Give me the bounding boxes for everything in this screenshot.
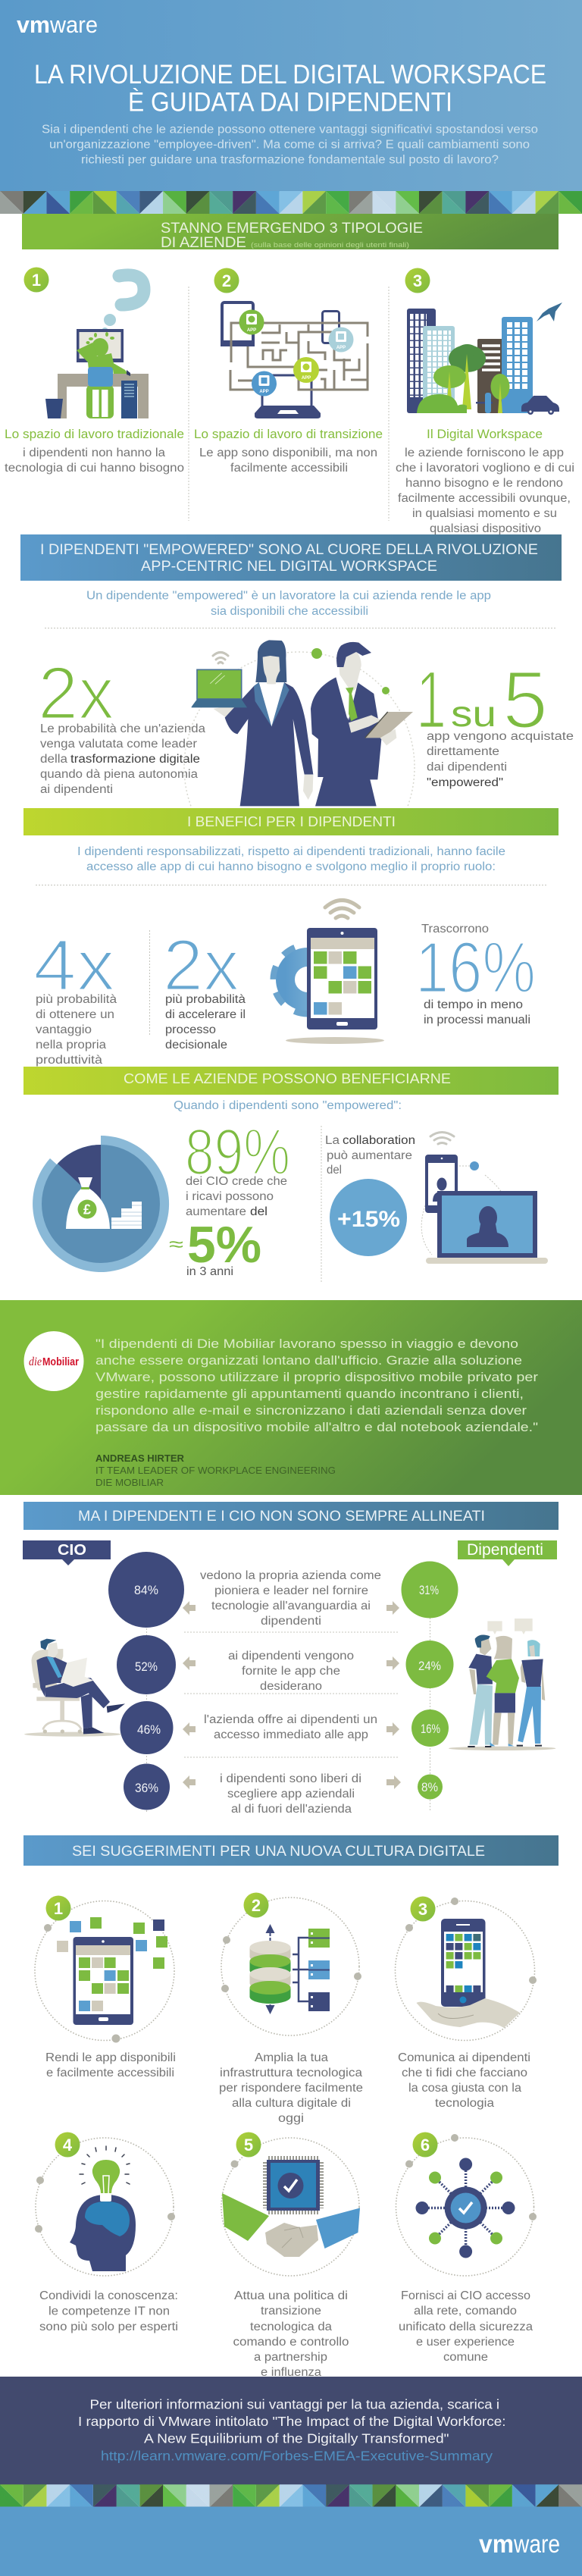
stat: 89%: dei CIO crede che — [186, 1175, 287, 1188]
badge 1 — [24, 267, 48, 293]
stat: 1 su 5: 5 — [502, 653, 548, 745]
label: Dipendenti: Dipendenti — [467, 1541, 543, 1559]
row 1 comparison: pioniera e leader nel fornire — [214, 1584, 368, 1597]
text: attribution: IT TEAM LEADER OF WORKPLACE ENGINEERING — [95, 1465, 336, 1476]
row 1 comparison: tecnologie all'avanguardia ai — [211, 1600, 371, 1612]
caption — [45, 2051, 176, 2079]
text: digital workspace: facilmente accessibili ovunque, — [398, 492, 571, 505]
caption: Attua una politica di — [234, 2289, 348, 2302]
caption: Rendi le app disponibili — [45, 2051, 176, 2064]
illustration: employees with devices — [180, 640, 423, 883]
row 4 comparison: 36% — [135, 1781, 158, 1795]
row 4 comparison: al di fuori dell'azienda — [231, 1803, 352, 1816]
badge: 3: 3 — [418, 1900, 427, 1919]
intro text: richiesti per guidare una trasformazione fondamentale sul posto di lavoro? — [81, 154, 499, 167]
stat: 89%: 89% — [185, 1116, 290, 1189]
stat: 2x: ai dipendenti — [40, 783, 113, 796]
stat: 4x — [33, 925, 117, 1067]
stat: 4x: nella propria — [36, 1039, 106, 1051]
text: call to action: Per ulteriori informazioni sui vantaggi per la tua azienda, scarica i — [89, 2397, 499, 2412]
illustration: digital workspace city — [407, 302, 562, 415]
title — [34, 60, 546, 117]
icon: chip and handshake — [222, 2158, 360, 2257]
stat: 2x: Le probabilità che un'azienda — [40, 722, 205, 735]
text: benefits intro: accesso alle app di cui hanno bisogno e svolgono meglio il proprio ruolo: — [86, 860, 496, 873]
panel: CIO vs employees — [23, 1502, 559, 1816]
stat: 4x: più probabilità — [36, 993, 117, 1006]
text: quote: "I dipendenti di Die Mobiliar lavorano spesso in viaggio e devono — [95, 1337, 518, 1351]
row 2 comparison: 52% — [135, 1659, 158, 1674]
text: definition: Un dipendente "empowered" è un lavoratore la cui azienda rende le app — [86, 590, 491, 602]
stat: 16% — [415, 923, 536, 1026]
badge: 4 — [55, 2132, 80, 2158]
caption: e user experience — [416, 2336, 515, 2349]
row 2 comparison: fornite le app che — [242, 1665, 340, 1678]
heading banner: misaligned: MA I DIPENDENTI E I CIO NON SONO SEMPRE ALLINEATI — [78, 1509, 485, 1525]
text: call to action: I rapporto di VMware intitolato "The Impact of the Digital Workforce: — [78, 2414, 506, 2429]
caption: a partnership — [254, 2351, 327, 2364]
badge: 2: 2 — [252, 1896, 261, 1915]
stat: 1 su 5: su — [451, 694, 496, 735]
caption: Condividi la conoscenza: — [39, 2289, 178, 2302]
text: call to action: A New Equilibrium of the Digitally Transformed" — [144, 2430, 449, 2446]
logo: die Mobiliar: die — [29, 1355, 42, 1368]
caption: e influenza — [261, 2366, 321, 2379]
text: quote: VMware, possono utilizzare il proprio dispositivo mobile privato per — [95, 1370, 538, 1384]
panel: closing blue bar — [0, 2506, 582, 2576]
icon: app light blue — [329, 327, 353, 352]
text: traditional workspace: i dipendenti non hanno la — [23, 447, 165, 459]
icon: phone on a hand — [417, 1919, 520, 2028]
stat: 16%: di tempo in meno — [424, 998, 523, 1011]
badge: 2 — [244, 1892, 268, 1918]
heading banner: company benefits — [23, 1067, 559, 1095]
icon: head with light bulb — [70, 2146, 136, 2271]
tip 3 — [396, 1897, 537, 2110]
text: attribution: ANDREAS HIRTER — [95, 1453, 185, 1464]
stat: 2x: 2x — [38, 651, 114, 735]
caption: Comunica ai dipendenti — [398, 2051, 530, 2064]
badge 2: 2 — [222, 271, 231, 290]
logo: vmware footer — [479, 2530, 560, 2558]
logo: die Mobiliar: Mobiliar — [42, 1356, 79, 1368]
stat: 2x — [38, 651, 205, 796]
panel: six suggestions — [23, 1835, 559, 2379]
label: CIO — [23, 1540, 111, 1565]
illustration: employees talking — [449, 1619, 555, 1750]
stat: collaboration +15%: La — [325, 1134, 340, 1147]
laptop — [192, 669, 247, 707]
row 2 comparison: ai dipendenti vengono — [228, 1650, 354, 1662]
stat: 2x: venga valutata come leader — [40, 738, 197, 751]
caption — [398, 2051, 530, 2110]
text: transition workspace: Lo spazio di lavoro di transizione — [194, 427, 383, 441]
caption: infrastruttura tecnologica — [220, 2067, 362, 2079]
stat: 2x more likely: decisionale — [165, 1039, 227, 1051]
tip 2 — [219, 1892, 363, 2125]
illustration: CIO seated — [24, 1639, 125, 1737]
stat: 89%: i ricavi possono — [186, 1190, 274, 1203]
panel: call to action footer — [0, 2377, 582, 2485]
stat: collaboration +15% — [325, 1134, 415, 1256]
vertical dividers — [189, 287, 389, 521]
caption: le competenze IT non — [48, 2305, 170, 2318]
row 4 comparison: 8% — [421, 1780, 438, 1794]
illustration: transition workspace — [221, 302, 368, 418]
caption: tecnologia — [435, 2097, 494, 2110]
text: quote: rispondono alle e-mail e sincronizzano i dati aziendali senza dover — [95, 1403, 527, 1418]
label: Dipendenti — [458, 1540, 557, 1566]
text: digital workspace: hanno bisogno e le rendono — [405, 477, 563, 490]
heading banner: empowered: I DIPENDENTI "EMPOWERED" SONO AL CUORE DELLA RIVOLUZIONE — [40, 542, 538, 558]
caption: Fornisci ai CIO accesso — [401, 2289, 530, 2302]
stat: collaboration +15%: può aumentare — [327, 1149, 412, 1162]
caption: che ti fidi che facciano — [402, 2067, 527, 2079]
stat: 2x more likely: 2x — [163, 925, 239, 1006]
caption: sono più solo per esperti — [39, 2321, 178, 2333]
row 4 comparison: scegliere app aziendali — [227, 1788, 355, 1800]
text: traditional workspace: Lo spazio di lavoro tradizionale — [5, 427, 184, 441]
text: quote: gestire rapidamente gli appuntamenti quando incontrano i clienti, — [95, 1387, 524, 1401]
text: attribution — [95, 1453, 336, 1488]
stat: 2x: quando dà piena autonomia — [40, 768, 198, 781]
heading banner: three types: DI AZIENDE — [161, 235, 246, 251]
row 2 comparison — [117, 1635, 453, 1694]
row 4 comparison: i dipendenti sono liberi di — [220, 1772, 361, 1785]
caption: e facilmente accessibili — [46, 2067, 174, 2079]
text: digital workspace: Il Digital Workspace — [427, 427, 543, 441]
panel: customer quote — [0, 1300, 582, 1495]
badge 2 — [214, 268, 239, 293]
caption: per rispondere facilmente — [219, 2082, 363, 2095]
stat: collaboration +15%: collaboration — [343, 1134, 415, 1147]
caption: la cosa giusta con la — [408, 2082, 521, 2095]
stat: 2x more likely: processo — [165, 1023, 216, 1036]
row 1 comparison: 31% — [419, 1583, 439, 1597]
stat: 2x more likely: di accelerare il — [165, 1008, 246, 1021]
panel: empowered employees — [20, 534, 574, 883]
caption: tecnologica da — [250, 2321, 332, 2333]
text: transition workspace — [194, 427, 383, 475]
text: transition workspace: facilmente accessibili — [230, 462, 348, 475]
row 1 comparison — [108, 1552, 458, 1628]
chart: revenue pie with money bag — [33, 1136, 169, 1272]
text: digital workspace: che i lavoratori vogliono e di cui — [396, 462, 574, 475]
stat: 16%: Trascorrono — [421, 923, 489, 935]
stat: 16%: in processi manuali — [424, 1014, 530, 1026]
stat: 89%: del — [250, 1205, 268, 1218]
text: definition: sia disponibili che accessibili — [211, 605, 368, 618]
panel: company benefits — [23, 1067, 559, 1283]
stat: 2x: trasformazione digitale — [70, 753, 200, 766]
row 3 comparison: 46% — [137, 1722, 161, 1737]
caption — [233, 2289, 349, 2379]
stat: 2x: della — [40, 753, 67, 766]
stat: 4x: vantaggio — [36, 1023, 92, 1036]
stat: 2x more likely: più probabilità — [165, 993, 246, 1006]
heading banner: empowered — [20, 534, 562, 581]
woman — [214, 640, 313, 806]
stat: 4x: 4x — [33, 925, 115, 1006]
heading banner: empowered: APP-CENTRIC NEL DIGITAL WORKSPACE — [141, 559, 437, 575]
stat: 16%: 16% — [415, 927, 536, 1008]
text: digital workspace: qualsiasi dispositivo — [430, 522, 541, 535]
text: quote — [95, 1337, 538, 1434]
icon: app lime — [293, 357, 319, 383]
caption: alla rete, comando — [414, 2305, 517, 2317]
stat: 1 su 5: direttamente — [427, 745, 499, 758]
row 1 comparison: 84% — [134, 1583, 158, 1597]
badge: 1 — [45, 1895, 71, 1921]
stat: 4x: di ottenere un — [36, 1008, 114, 1021]
stat: 2x more likely — [163, 925, 246, 1051]
text: digital workspace: le aziende forniscono le app — [405, 447, 564, 459]
logo: die Mobiliar — [24, 1331, 83, 1391]
heading banner: benefits — [23, 808, 559, 835]
intro text: Sia i dipendenti che le aziende possono ottenere vantaggi significativi spostandosi verso — [42, 124, 538, 136]
caption: Amplia la tua — [255, 2051, 328, 2064]
label: CIO: CIO — [58, 1542, 86, 1559]
stat: 1 su 5 — [416, 653, 574, 789]
stat: collaboration +15%: del — [327, 1164, 342, 1177]
stat: 89%: aumentare — [186, 1205, 246, 1218]
logo: vmware footer: ware — [513, 2530, 560, 2558]
caption: oggi — [278, 2112, 304, 2125]
text: attribution: DIE MOBILIAR — [95, 1477, 164, 1488]
stat: 89%: 5% — [187, 1216, 261, 1274]
stat: 1 su 5: 1 — [416, 653, 446, 745]
triangle strip top — [0, 191, 582, 214]
text: digital workspace — [396, 427, 574, 535]
logo: vmware: vm — [17, 11, 50, 38]
logo: vmware footer: vm — [479, 2530, 514, 2558]
icon: app lime: APP — [302, 376, 311, 381]
badge: 6: 6 — [421, 2136, 430, 2155]
heading banner: misaligned — [23, 1502, 559, 1530]
title: LA RIVOLUZIONE DEL DIGITAL WORKSPACE — [34, 60, 546, 89]
panel: three types of companies — [5, 214, 574, 535]
text: when empowered: Quando i dipendenti sono "empowered": — [174, 1099, 402, 1112]
badge: 1: 1 — [54, 1899, 63, 1918]
caption — [399, 2289, 533, 2364]
badge: 5 — [236, 2132, 261, 2158]
panel: header — [0, 0, 582, 192]
text: transition workspace: Le app sono disponibili, ma non — [199, 447, 377, 459]
badge: 4: 4 — [63, 2136, 73, 2155]
row 1 comparison: vedono la propria azienda come — [200, 1569, 381, 1582]
tip 6 — [396, 2132, 537, 2364]
text: traditional workspace: tecnologia di cui hanno bisogno — [5, 462, 184, 475]
text: quote: passare da un dispositivo mobile all'altro e dal notebook aziendale." — [95, 1420, 538, 1434]
caption: comune — [443, 2351, 488, 2364]
title: È GUIDATA DAI DIPENDENTI — [128, 88, 452, 117]
caption: unificato della sicurezza — [399, 2321, 533, 2333]
illustration: traditional workspace — [45, 275, 149, 418]
row 2 comparison: desiderano — [260, 1680, 322, 1693]
icon: wifi — [213, 652, 228, 663]
badge: 3 — [411, 1897, 435, 1921]
tip 5 — [221, 2132, 360, 2379]
tip 4 — [35, 2132, 178, 2333]
badge 3 — [405, 268, 430, 293]
row 2 comparison: 24% — [418, 1659, 441, 1673]
text: digital workspace: in qualsiasi momento e su — [412, 507, 557, 520]
text: benefits intro — [77, 845, 505, 873]
text: link: http://learn.vmware.com/Forbes-EMEA-Executive-Summary — [101, 2449, 493, 2464]
row 3 comparison: 16% — [421, 1722, 440, 1736]
row 4 comparison — [124, 1763, 443, 1816]
triangle strip bottom — [0, 2484, 582, 2507]
icon: app blue: APP — [259, 390, 269, 394]
stat: 1 su 5: app vengono acquistate — [427, 730, 574, 743]
panel: employee benefits — [23, 808, 559, 1067]
stat: 89%: in 3 anni — [186, 1265, 233, 1278]
icon: security hub — [415, 2158, 515, 2258]
icon: wifi large — [325, 901, 359, 918]
text: quote: anche essere organizzati lontano dall'ufficio. Grazie alla soluzione — [95, 1353, 522, 1368]
row 3 comparison: l'azienda offre ai dipendenti un — [204, 1713, 377, 1726]
tip 1 — [35, 1895, 176, 2079]
stat: 89% — [169, 1116, 290, 1278]
badge: 5: 5 — [244, 2136, 253, 2155]
icon: app light blue: APP — [336, 346, 346, 350]
caption: comando e controllo — [233, 2336, 349, 2349]
icon: app green — [239, 309, 264, 335]
heading banner: benefits: I BENEFICI PER I DIPENDENTI — [187, 814, 396, 829]
icon: app blue — [252, 371, 277, 396]
icon: scalable infrastructure — [250, 1924, 330, 2014]
stat: 1 su 5: "empowered" — [427, 776, 503, 789]
badge 3: 3 — [413, 271, 422, 290]
row 3 comparison — [120, 1701, 449, 1754]
caption — [39, 2289, 178, 2333]
icon: app green: APP — [247, 328, 256, 333]
heading banner: three types — [22, 214, 559, 251]
icon: gear and phone — [273, 928, 384, 1044]
intro text: un'organizzazione "employee-driven". Ma come ci si arriva? E quali cambiamenti sono — [49, 139, 530, 152]
caption: alla cultura digitale di — [232, 2097, 351, 2110]
logo: vmware: ware — [49, 11, 98, 38]
man — [311, 642, 413, 806]
stat: collaboration +15%: +15% — [337, 1207, 400, 1232]
badge 1: 1 — [32, 271, 41, 290]
icon: tablet with apps — [57, 1917, 167, 2025]
text: definition — [86, 590, 491, 618]
row 1 comparison: dipendenti — [261, 1615, 321, 1628]
text: call to action — [78, 2397, 506, 2446]
stat: 89%: ≈ — [169, 1233, 183, 1255]
text: traditional workspace — [5, 427, 184, 475]
caption — [219, 2051, 363, 2125]
illustration: video collaboration devices — [421, 1133, 548, 1264]
heading banner: three types: (sulla base delle opinioni degli utenti finali) — [251, 241, 409, 249]
text: benefits intro: I dipendenti responsabilizzati, rispetto ai dipendenti tradizionali, hanno facile — [77, 845, 505, 858]
intro text — [42, 124, 538, 167]
heading banner: suggestions — [23, 1835, 559, 1866]
logo: vmware — [17, 11, 98, 38]
chart: revenue pie with money bag: £ — [83, 1202, 91, 1217]
heading banner: suggestions: SEI SUGGERIMENTI PER UNA NUOVA CULTURA DIGITALE — [72, 1844, 485, 1860]
row 3 comparison: accesso immediato alle app — [214, 1728, 368, 1741]
badge: 6 — [412, 2132, 438, 2158]
stat: 1 su 5: dai dipendenti — [427, 761, 507, 773]
caption: transizione — [261, 2305, 321, 2317]
stat: 4x: produttività — [36, 1054, 102, 1067]
heading banner: three types: STANNO EMERGENDO 3 TIPOLOGIE — [161, 221, 423, 237]
heading banner: company benefits: COME LE AZIENDE POSSONO BENEFICIARNE — [124, 1071, 451, 1086]
